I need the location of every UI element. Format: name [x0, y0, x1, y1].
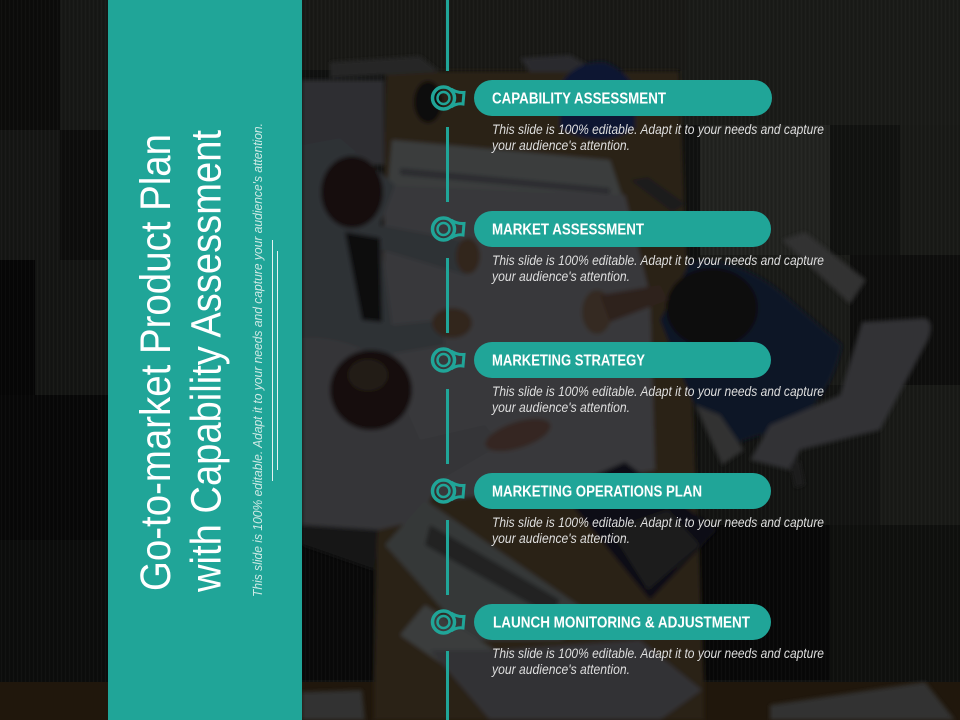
body text: your audience's attention. — [491, 137, 630, 153]
pill — [474, 211, 771, 247]
heading: CAPABILITY ASSESSMENT — [492, 90, 666, 108]
title: with Capability Assessment — [182, 130, 230, 593]
title — [132, 130, 230, 593]
body text: your audience's attention. — [491, 399, 630, 415]
step 4: marketing operations plan — [432, 473, 824, 546]
icon: ring marker 1 — [432, 87, 464, 109]
body text: your audience's attention. — [491, 530, 630, 546]
title: Go-to-market Product Plan — [132, 134, 180, 591]
blue cap — [560, 62, 635, 139]
body text: This slide is 100% editable. Adapt it to your needs and capture — [492, 121, 824, 137]
man two — [302, 338, 500, 530]
icon: ring marker 4 — [432, 480, 464, 502]
body text: your audience's attention. — [491, 661, 630, 677]
table and objects — [302, 55, 955, 720]
pill — [474, 473, 771, 509]
floor wood strip — [0, 682, 960, 720]
step 2: market assessment — [432, 211, 824, 284]
body text: This slide is 100% editable. Adapt it to your needs and capture — [492, 514, 824, 530]
dark mug — [414, 81, 442, 123]
icon: ring marker 5 — [432, 611, 464, 633]
pill — [474, 604, 771, 640]
pill — [474, 80, 772, 116]
body text: your audience's attention. — [491, 268, 630, 284]
phone — [630, 177, 686, 212]
laptop — [560, 462, 717, 600]
body text: This slide is 100% editable. Adapt it to your needs and capture — [492, 645, 824, 661]
heading: LAUNCH MONITORING & ADJUSTMENT — [493, 614, 750, 632]
man one — [302, 138, 478, 355]
step 1: capability assessment — [432, 80, 824, 153]
pill — [474, 342, 771, 378]
body text: This slide is 100% editable. Adapt it to your needs and capture — [492, 383, 824, 399]
subtitle rule — [272, 240, 278, 481]
step 5: launch monitoring and adjustment — [432, 604, 824, 677]
chair — [782, 232, 866, 304]
woman — [660, 261, 842, 445]
subtitle: This slide is 100% editable. Adapt it to your needs and capture your audience's attention. — [250, 123, 265, 597]
icon: ring marker 2 — [432, 218, 464, 240]
body text: This slide is 100% editable. Adapt it to your needs and capture — [492, 252, 824, 268]
heading: MARKETING OPERATIONS PLAN — [492, 484, 702, 500]
big paper — [384, 185, 655, 500]
step 3: marketing strategy — [432, 342, 824, 415]
rolled plans — [388, 140, 625, 205]
timeline line — [446, 0, 449, 720]
papers stack — [385, 500, 600, 640]
left title panel — [108, 0, 302, 720]
heading: MARKET ASSESSMENT — [492, 222, 644, 238]
icon: ring marker 3 — [432, 349, 464, 371]
heading: MARKETING STRATEGY — [492, 352, 646, 370]
